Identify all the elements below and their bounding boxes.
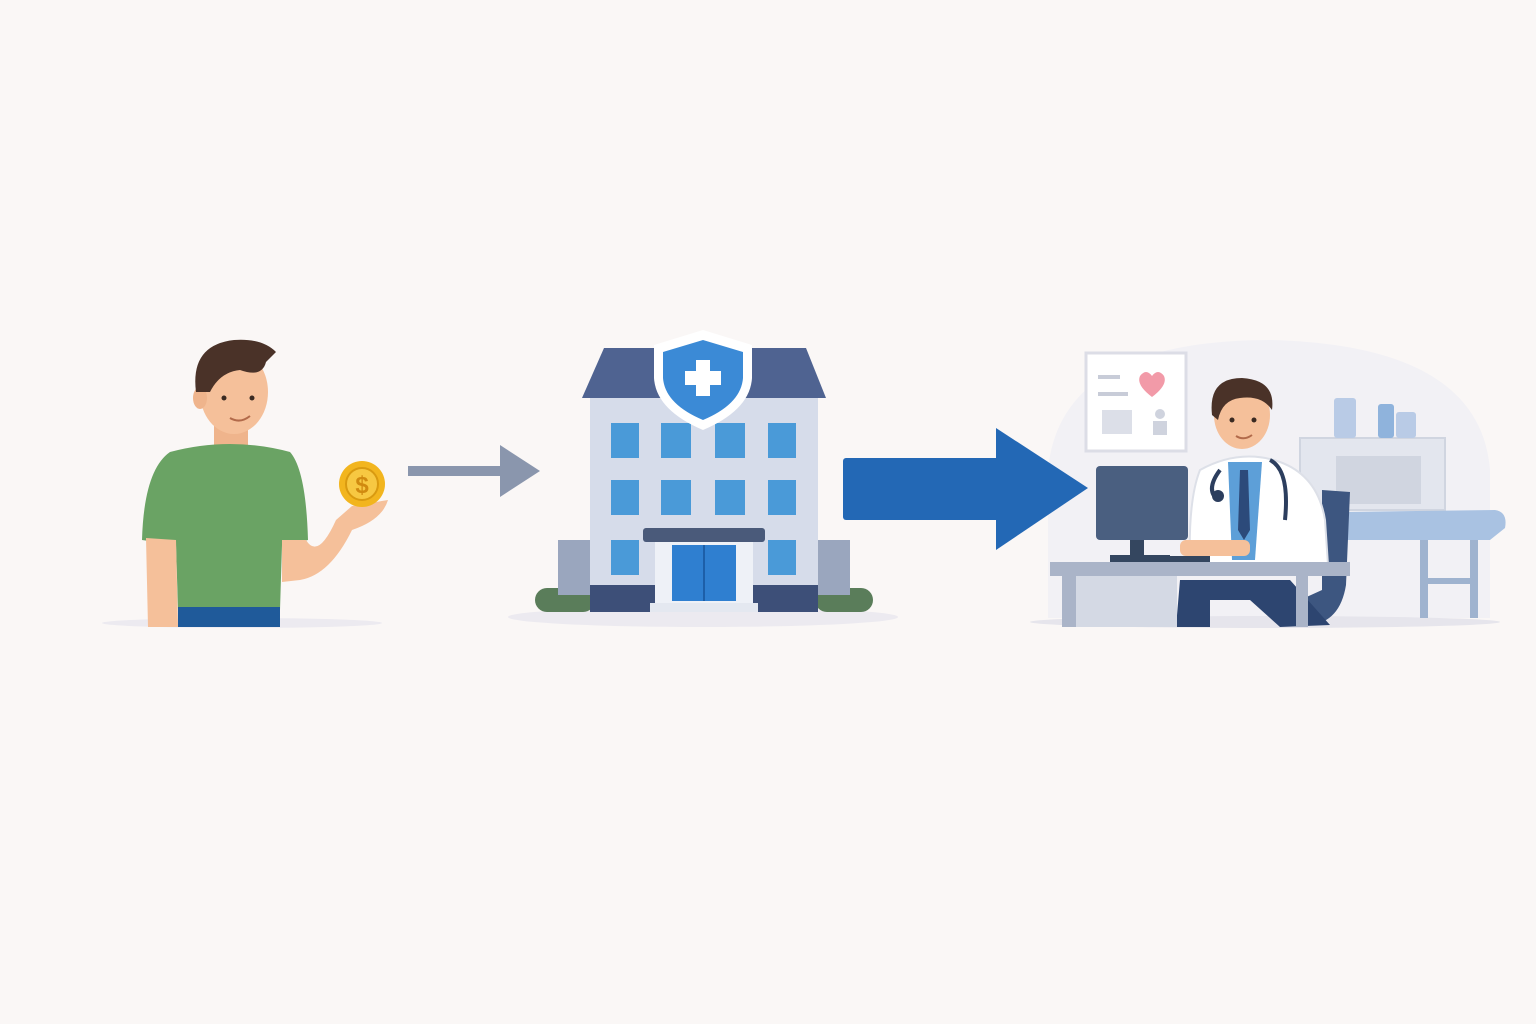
doctor (1176, 378, 1330, 627)
hospital building (508, 330, 898, 627)
icon: coin (339, 461, 385, 507)
chair (1300, 490, 1350, 625)
head (200, 350, 268, 434)
base (590, 585, 818, 612)
roof (582, 348, 826, 398)
pants (178, 607, 280, 627)
body (590, 396, 818, 612)
icon: shield with cross (654, 330, 752, 430)
arrow: small gray (408, 445, 540, 497)
desk (1050, 562, 1350, 627)
left arm (146, 538, 178, 627)
right arm (282, 500, 388, 582)
entrance (655, 540, 753, 612)
doctor at desk scene (1030, 340, 1506, 628)
hair (195, 340, 276, 392)
icon: coin: $ (355, 472, 369, 499)
computer monitor (1096, 466, 1210, 562)
wings (558, 540, 592, 595)
neck (214, 420, 248, 456)
bushes (535, 588, 595, 612)
arrow: big blue (843, 428, 1088, 550)
windows (611, 423, 796, 575)
person with coin (102, 340, 388, 628)
cabinet and bottles (1300, 398, 1445, 510)
exam bed (1345, 510, 1506, 618)
medical chart board (1086, 353, 1186, 451)
shirt (142, 444, 308, 610)
legs (1176, 580, 1330, 627)
